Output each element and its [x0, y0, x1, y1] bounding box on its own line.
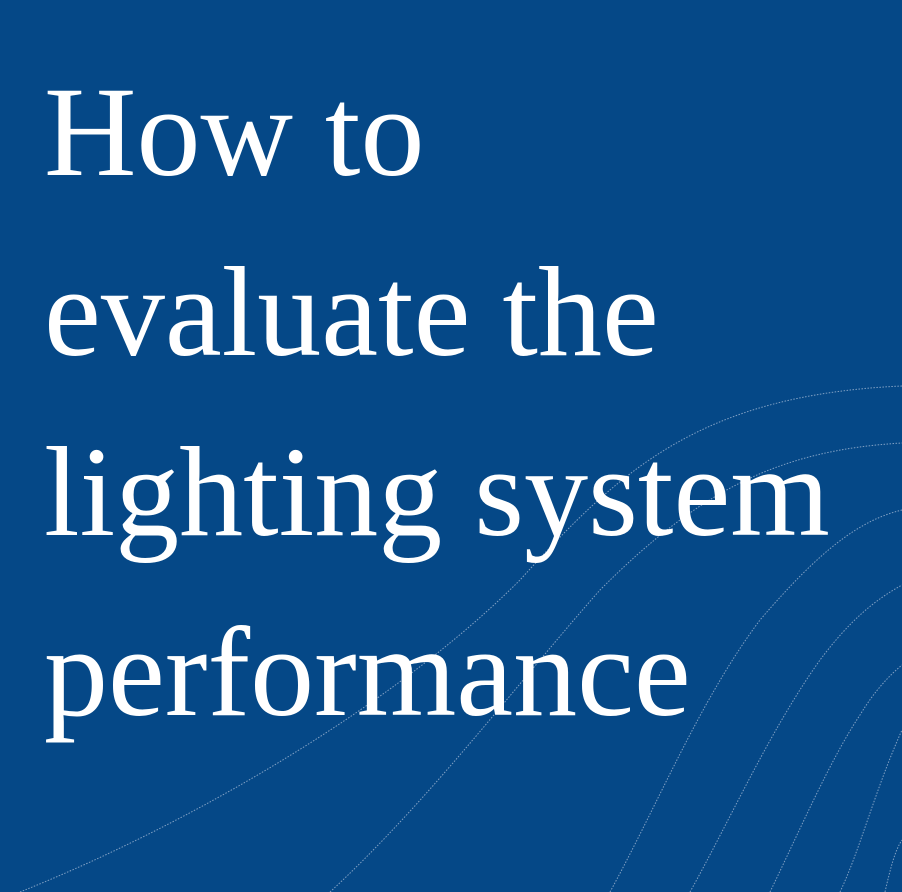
- title: performance: [44, 601, 691, 743]
- title: How to: [44, 61, 424, 203]
- title: evaluate the: [44, 241, 659, 383]
- title: lighting system: [44, 421, 830, 563]
